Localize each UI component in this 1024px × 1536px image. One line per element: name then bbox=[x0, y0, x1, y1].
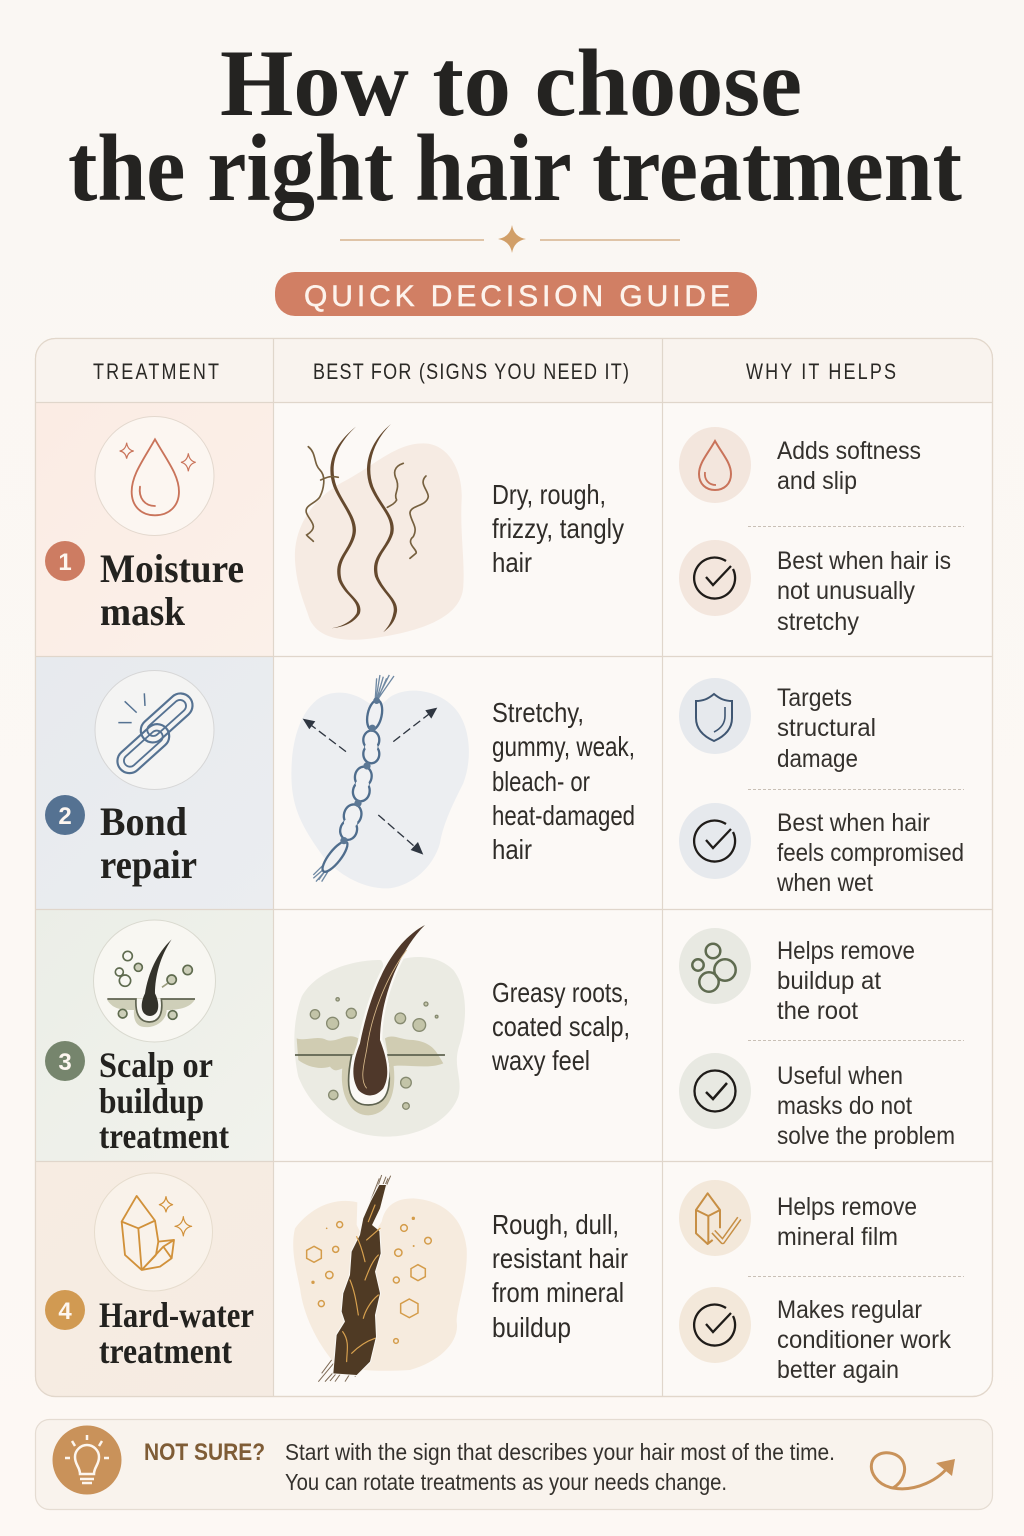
header row: WHY IT HELPS bbox=[746, 360, 896, 385]
name: moisture mask: Moisture bbox=[100, 546, 244, 591]
benefit text 1a bbox=[777, 437, 921, 495]
name: scalp or buildup treatment: treatment bbox=[99, 1116, 229, 1156]
benefit text 1a: and slip bbox=[777, 467, 857, 495]
benefit text 1a: Adds softness bbox=[777, 437, 921, 465]
signs text 1 bbox=[492, 479, 624, 578]
number badge 4 bbox=[45, 1290, 85, 1330]
signs text 4 bbox=[492, 1209, 628, 1343]
callout text bbox=[285, 1439, 835, 1495]
benefit text 4a: mineral film bbox=[777, 1223, 898, 1251]
signs text 2: bleach- or bbox=[492, 766, 590, 797]
benefit text 1b: Best when hair is bbox=[777, 547, 951, 575]
number badge 2 bbox=[45, 795, 85, 835]
icon: chain link bbox=[95, 670, 214, 790]
row 4: hard-water treatment bbox=[36, 1161, 964, 1396]
signs text 2: gummy, weak, bbox=[492, 731, 635, 762]
name: hard-water treatment: Hard-water bbox=[99, 1295, 254, 1335]
benefit text 2a bbox=[777, 684, 876, 773]
benefit text 2a: structural bbox=[777, 714, 876, 742]
illustration: stretched bond chain bbox=[291, 675, 469, 888]
signs text 1: hair bbox=[492, 547, 532, 578]
signs text 1: Dry, rough, bbox=[492, 479, 606, 510]
benefit text 1b bbox=[777, 547, 951, 636]
title: the right hair treatment bbox=[68, 115, 962, 221]
treatment cell 1 bbox=[36, 402, 273, 656]
name: hard-water treatment: treatment bbox=[99, 1331, 232, 1371]
benefit text 3b: Useful when bbox=[777, 1062, 903, 1090]
illustration: hair follicle with buildup bbox=[294, 925, 465, 1137]
illustration: frizzy hair strands bbox=[295, 424, 464, 640]
benefit text 4b: conditioner work bbox=[777, 1326, 951, 1354]
number badge 2: 2 bbox=[58, 803, 72, 830]
icon: check 1 bbox=[679, 540, 751, 616]
header row bbox=[36, 339, 992, 402]
benefit text 2b bbox=[776, 809, 964, 897]
benefit text 3b: solve the problem bbox=[777, 1122, 955, 1150]
signs text 4: buildup bbox=[492, 1312, 571, 1343]
signs text 3: waxy feel bbox=[491, 1045, 590, 1076]
icon: small drop bbox=[679, 427, 751, 503]
icon: looping arrow bbox=[871, 1453, 955, 1489]
icon: bubbles bbox=[679, 928, 751, 1004]
benefit text 3a: the root bbox=[777, 997, 858, 1025]
callout label: NOT SURE? bbox=[144, 1439, 265, 1466]
signs text 2: heat-damaged bbox=[492, 800, 635, 831]
callout text: You can rotate treatments as your needs change. bbox=[285, 1469, 727, 1495]
benefit text 4a bbox=[777, 1193, 917, 1251]
callout panel bbox=[36, 1420, 992, 1510]
icon: water drop with sparkles bbox=[95, 416, 214, 536]
name: scalp or buildup treatment: Scalp or bbox=[99, 1045, 213, 1085]
number badge 1 bbox=[45, 541, 85, 581]
treatment cell 3 bbox=[36, 909, 273, 1161]
callout text: Start with the sign that describes your hair most of the time. bbox=[285, 1439, 835, 1465]
benefit text 1b: not unusually bbox=[777, 577, 915, 605]
benefit text 3b: masks do not bbox=[777, 1092, 912, 1120]
benefit text 2a: damage bbox=[777, 745, 858, 773]
decision table bbox=[36, 338, 992, 1396]
subtitle pill bbox=[275, 272, 757, 316]
benefit text 2b: when wet bbox=[776, 869, 873, 897]
title divider with star bbox=[340, 225, 680, 253]
title: How to choose bbox=[220, 30, 802, 136]
signs text 1: frizzy, tangly bbox=[492, 513, 624, 544]
icon: check 2 bbox=[679, 803, 751, 879]
benefit text 4b: Makes regular bbox=[777, 1296, 922, 1324]
signs text 3: coated scalp, bbox=[492, 1011, 630, 1042]
signs text 2: Stretchy, bbox=[492, 697, 584, 728]
signs text 4: Rough, dull, bbox=[492, 1209, 619, 1240]
signs text 2: hair bbox=[492, 834, 532, 865]
icon: follicle with buildup bbox=[94, 920, 216, 1042]
treatment cell 2 bbox=[36, 656, 273, 909]
signs text 2 bbox=[492, 697, 635, 865]
row 1: moisture mask bbox=[36, 402, 964, 656]
icon: check 4 bbox=[679, 1287, 751, 1363]
name: scalp or buildup treatment: buildup bbox=[99, 1081, 204, 1121]
subtitle pill: QUICK DECISION GUIDE bbox=[304, 280, 730, 313]
table panel bbox=[36, 338, 992, 1396]
signs text 4: from mineral bbox=[492, 1277, 624, 1308]
name: bond repair: Bond bbox=[100, 799, 187, 844]
benefit text 4a: Helps remove bbox=[777, 1193, 917, 1221]
name: moisture mask: mask bbox=[100, 589, 186, 634]
row 3: scalp or buildup treatment bbox=[36, 909, 964, 1161]
signs text 3 bbox=[491, 977, 630, 1076]
number badge 4: 4 bbox=[58, 1298, 72, 1325]
signs text 4: resistant hair bbox=[492, 1243, 628, 1274]
icon: shield bbox=[679, 678, 751, 754]
not sure callout bbox=[36, 1420, 992, 1510]
number badge 3 bbox=[45, 1041, 85, 1081]
number badge 1: 1 bbox=[58, 549, 72, 576]
icon: check 3 bbox=[679, 1053, 751, 1129]
icon: crystal with sparkles bbox=[94, 1173, 212, 1291]
header row: BEST FOR (SIGNS YOU NEED IT) bbox=[313, 360, 629, 385]
icon: light bulb bbox=[52, 1426, 122, 1494]
benefit text 4b: better again bbox=[777, 1356, 899, 1384]
benefit text 4b bbox=[777, 1296, 951, 1384]
benefit text 3a: buildup at bbox=[777, 967, 881, 995]
illustration: rough hair with mineral deposits bbox=[293, 1175, 467, 1382]
treatment cell 4 bbox=[36, 1161, 273, 1396]
benefit text 2b: Best when hair bbox=[777, 809, 930, 837]
benefit text 2a: Targets bbox=[777, 684, 852, 712]
benefit text 2b: feels compromised bbox=[777, 839, 964, 867]
benefit text 3b bbox=[777, 1062, 955, 1150]
number badge 3: 3 bbox=[58, 1049, 72, 1076]
name: bond repair: repair bbox=[100, 842, 197, 887]
benefit text 1b: stretchy bbox=[777, 608, 859, 636]
title bbox=[68, 30, 962, 221]
benefit text 3a: Helps remove bbox=[777, 937, 915, 965]
benefit text 3a bbox=[777, 937, 915, 1025]
row 2: bond repair bbox=[36, 656, 964, 909]
header row: TREATMENT bbox=[93, 360, 219, 385]
signs text 3: Greasy roots, bbox=[492, 977, 629, 1008]
icon: crystal with check bbox=[679, 1180, 751, 1256]
